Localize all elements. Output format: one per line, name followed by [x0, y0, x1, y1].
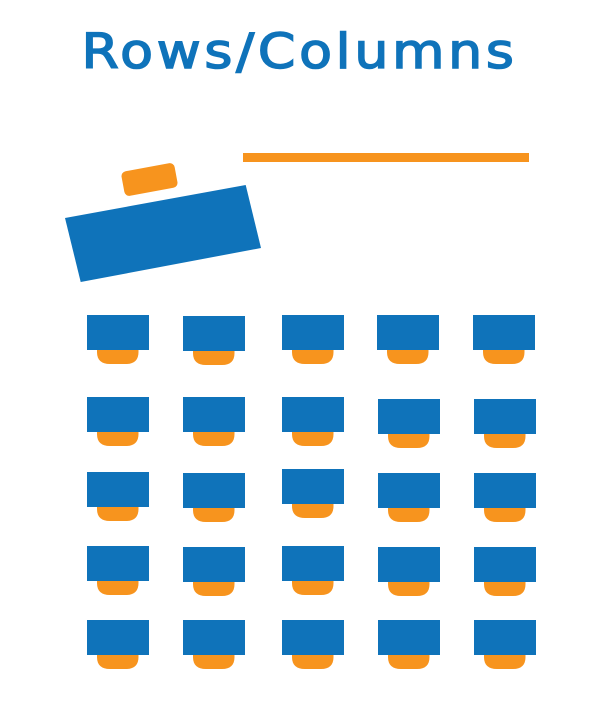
student desks: row 5 [87, 620, 536, 669]
teacher desk [65, 185, 261, 282]
whiteboard line [243, 153, 529, 162]
student desks: row 4 [87, 546, 536, 596]
student desks: row 2 [87, 397, 536, 448]
student desks: row 1 [87, 315, 535, 365]
teacher chair [121, 162, 178, 197]
student desks: row 3 [87, 469, 536, 522]
title: Rows/Columns [82, 25, 518, 80]
